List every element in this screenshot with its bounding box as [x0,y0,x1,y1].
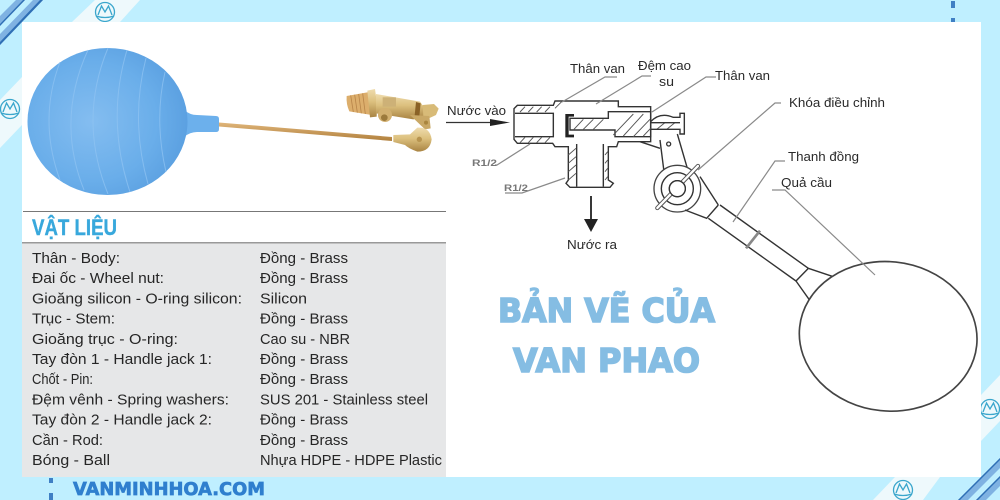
table rows: Gioăng silicon - O-ring silicon: [32,291,242,307]
table rows: Gioăng trục - O-ring: [32,332,178,348]
table rows: Đồng - Brass [260,352,348,368]
table rows: Cần - Rod: [32,433,103,449]
table background [22,243,446,477]
table rows: Silicon [260,291,307,307]
website footer: VANMINHHOA.COM [73,479,265,500]
table rows: Tay đòn 1 - Handle jack 1: [32,352,212,368]
heading: VẬT LIỆU: VẬT LIỆU [32,215,117,240]
drawing labels: Khóa điều chỉnh [789,96,885,110]
table rows: Đồng - Brass [260,251,348,267]
dotted marks: bottom left [49,478,53,500]
logo: bottom [894,480,912,500]
corner stripes: bottom right [958,458,1000,500]
materials table [22,215,446,477]
table rows [32,251,442,469]
brass rod [219,122,392,141]
drawing labels: Thân van [570,62,625,76]
technical drawing of the float valve [446,59,984,420]
logo: top [96,2,114,22]
table rows: Trục - Stem: [32,312,115,328]
table rows: Đồng - Brass [260,312,348,328]
table rows: Tay đòn 2 - Handle jack 2: [32,413,212,429]
table rows: Bóng - Ball [32,453,110,469]
drawing labels: Quả cầu [781,176,832,190]
table rows: Đồng - Brass [260,413,348,429]
table top rule [22,242,446,244]
leader lines [495,76,875,275]
dotted marks: top right [951,1,955,22]
table rows: Đai ốc - Wheel nut: [32,271,164,287]
table rows: Cao su - NBR [260,332,350,348]
table rows: Nhựa HDPE - HDPE Plastic [260,453,442,469]
valve cross-section [514,101,718,218]
title: BẢN VẼ CỦA VAN PHAO: BẢN VẼ CỦA [498,287,715,330]
divider under photo [23,211,446,212]
table rows: Đồng - Brass [260,433,348,449]
brass valve [347,89,439,152]
table rows: Đệm vênh - Spring washers: [32,392,229,408]
drawing labels: Thanh đồng [788,150,859,164]
table rows: Đồng - Brass [260,372,348,388]
drawing labels: R1/2 [504,183,528,193]
drawing labels: Thân van [715,69,770,83]
drawing labels [447,59,885,252]
arrow: water out [584,196,598,232]
rod and ball outline [708,205,984,420]
table rows: Đồng - Brass [260,271,348,287]
corner stripes: top left [0,0,43,45]
logo: right [980,400,1000,418]
table rows: Thân - Body: [32,251,120,267]
blue float ball [28,48,219,195]
table rows: Chốt - Pin: [32,372,93,388]
drawing labels: Nước vào [447,104,506,118]
title: BẢN VẼ CỦA VAN PHAO: VAN PHAO [513,341,700,380]
title: BẢN VẼ CỦA VAN PHAO [498,287,715,380]
drawing labels: Đệm cao [638,59,691,73]
photo: float valve [23,48,446,212]
arrow: water in [446,119,510,126]
table rows: SUS 201 - Stainless steel [260,392,428,408]
drawing labels: Nước ra [567,238,617,252]
drawing labels: R1/2 [472,158,497,168]
logo: left [0,100,20,118]
drawing labels: su [659,75,674,89]
